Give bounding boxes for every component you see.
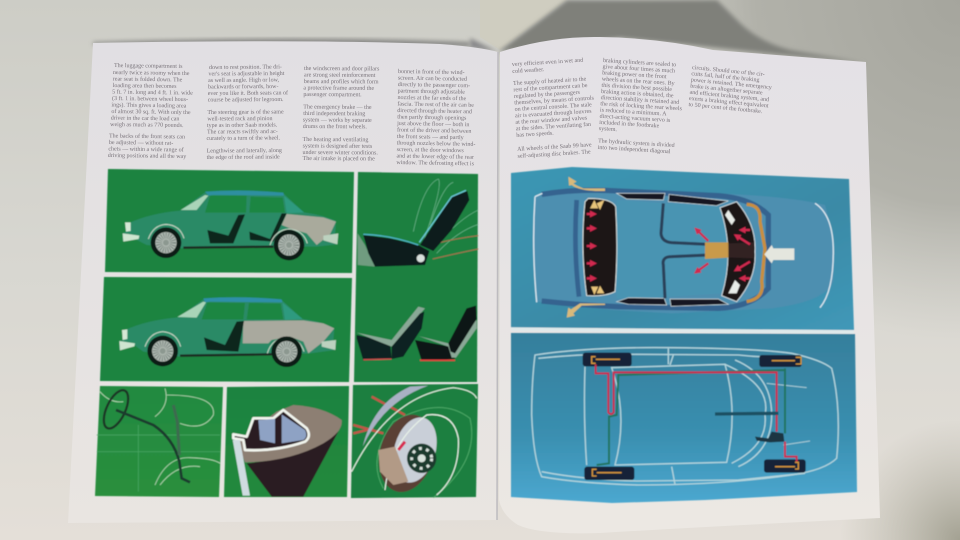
panel: car with rear seat folded xyxy=(105,169,354,273)
gutter line xyxy=(497,52,498,520)
text column 4: window. The defrosting effect is xyxy=(396,159,475,167)
text column 1: ings). This gives a loading area xyxy=(111,101,187,110)
panel: seats xyxy=(354,172,478,382)
car outline with brake circuits xyxy=(532,348,838,485)
text column 6 xyxy=(598,58,685,156)
panel: heating and ventilation xyxy=(511,167,854,330)
text column 6: give about four times as much xyxy=(602,63,675,75)
right page body text xyxy=(512,56,773,160)
rear window xyxy=(583,198,617,296)
text column 1: The luggage compartment is xyxy=(114,63,183,70)
text column 2: ever you like it. Both seats can of xyxy=(208,89,288,97)
text column 4: screen. Air can be conducted xyxy=(398,75,467,83)
text column 1: 5 ft. 7 in. long and 4 ft. 1 in. wide xyxy=(112,88,193,97)
text column 2: curately to a turn of the wheel. xyxy=(206,135,280,142)
text column 7: cuits fail, half of the braking xyxy=(691,70,760,84)
text column 2: the edge of the roof and inside xyxy=(207,154,280,161)
text column 1: The backs of the front seats can xyxy=(109,132,185,141)
text column 6: braking cylinders are sealed to xyxy=(603,58,676,68)
text column 2: backwards or forwards, how- xyxy=(208,83,278,91)
shadow behind the right page xyxy=(498,0,866,63)
text column 6: The hydraulic system is divided xyxy=(598,138,675,149)
panel: brake system xyxy=(511,333,857,503)
text column 4: partment through adjustable xyxy=(398,88,465,96)
text column 4: and at the lower edge of the rear xyxy=(396,152,474,161)
text column 6: included in the footbrake xyxy=(599,119,660,130)
text column 5: very efficient even in wet and xyxy=(512,57,583,68)
rear seat xyxy=(249,213,287,242)
master cylinder xyxy=(755,432,784,442)
text column 3: under severe winter conditions. xyxy=(303,150,378,156)
text column 6: braking action is obtained, the xyxy=(601,89,674,99)
text column 7: and efficient braking system, and xyxy=(689,89,769,103)
blue illustration panels xyxy=(511,167,857,503)
text column 3: beams and profiles which form xyxy=(304,78,379,85)
wheels xyxy=(151,227,181,258)
text column 7: to 50 per cent of the footbrake. xyxy=(688,101,763,115)
text column 3: system — works by separate xyxy=(303,117,372,124)
front seat reclined xyxy=(204,321,244,352)
text column 4: bonnet in front of the wind- xyxy=(398,68,465,76)
text column 6: into two independent diagonal xyxy=(598,145,671,155)
text column 3: a protective frame around the xyxy=(303,84,374,92)
front seat xyxy=(207,214,245,243)
text column 1: rear seat is folded down. The xyxy=(113,75,183,83)
text column 3: The heating and ventilating xyxy=(303,137,368,143)
text column 1: driving positions and all the way xyxy=(108,153,186,160)
text column 1 xyxy=(108,63,194,160)
text column 2: type as in other Saab models. xyxy=(207,123,278,129)
panel: steering xyxy=(95,386,223,497)
text column 1: nearly twice as roomy when the xyxy=(113,70,190,77)
text column 3: system is designed after tests xyxy=(303,142,373,150)
text column 5: has two speeds. xyxy=(516,131,554,139)
text column 4: directed through the heater and xyxy=(397,108,472,115)
text column 7: exerts a braking effect equivalent xyxy=(689,95,769,110)
brake pads xyxy=(583,353,632,366)
shadow behind gutter xyxy=(470,38,498,52)
text column 3: drums on the front wheels. xyxy=(303,123,367,130)
text column 5: at the rear window and valves xyxy=(515,115,588,126)
green brake circuit xyxy=(597,368,785,465)
text column 2 xyxy=(206,64,288,161)
right page xyxy=(499,37,880,533)
adjustable seat with arcs xyxy=(358,179,478,267)
car side view, seats reclined xyxy=(119,297,336,367)
red air arrows xyxy=(587,214,750,278)
left page body text xyxy=(108,63,477,167)
text column 1: be adjusted — without rat- xyxy=(109,140,173,147)
shadow above the left page xyxy=(93,38,470,47)
text column 2: ver's seat is adjustable in height xyxy=(209,71,285,78)
disc brake xyxy=(352,386,477,498)
car side view, load area xyxy=(123,191,338,260)
panel: body profile xyxy=(224,386,349,497)
text column 4: just above the floor — both in xyxy=(396,120,469,128)
text column 5: rest of the compartment can be xyxy=(513,82,588,93)
text column 5 xyxy=(512,56,598,160)
side windows xyxy=(617,193,665,200)
text column 6: is reduced to a minimum. A xyxy=(600,108,667,118)
text column 6: system. xyxy=(599,126,618,133)
wheels xyxy=(147,336,178,366)
text column 1: chets — within a wide range of xyxy=(108,145,184,153)
text column 4: directly to the passenger com- xyxy=(398,82,470,89)
text column 1: (3 ft. 1 in. between wheel hous- xyxy=(112,95,188,103)
table shadows xyxy=(93,0,866,63)
green illustration panels xyxy=(95,169,478,498)
text column 7 xyxy=(688,64,773,116)
pedal rod xyxy=(715,408,778,419)
text column 1: driver in the car the load can xyxy=(111,115,179,122)
text column 1: of almost 30 sq. ft. With only the xyxy=(111,108,191,116)
text column 4 xyxy=(395,68,477,167)
text column 6: this division the best possible xyxy=(601,83,673,93)
text column 1: weigh as much as 770 pounds. xyxy=(110,122,184,129)
text column 3: The air intake is placed on the xyxy=(303,156,375,162)
text column 5: All wheels of the Saab 99 have xyxy=(517,141,592,153)
text column 5: The supply of heated air to the xyxy=(513,75,587,87)
text column 4: then partly through openings xyxy=(397,114,467,122)
text column 5: on the central console. The stale xyxy=(515,102,592,113)
text column 4: front of the driver and between xyxy=(397,126,472,135)
text column 6: wheels as on the rear ones. By xyxy=(602,77,675,87)
text column 4: the front seats — and partly xyxy=(397,133,464,141)
outside air intake xyxy=(747,204,765,302)
text column 5: self-adjusting disc brakes. The xyxy=(517,148,591,160)
text column 4: through nozzles below the wind- xyxy=(397,140,475,148)
text column 3: The emergency brake — the xyxy=(303,104,372,111)
text column 7: power is retained. The emergency xyxy=(691,77,772,91)
panel: car with seats reclined xyxy=(100,277,352,382)
text column 2: down to rest position. The dri- xyxy=(209,64,282,71)
text column 3: passenger compartment. xyxy=(303,92,362,98)
text column 5: regulated by the passengers xyxy=(514,90,581,100)
air ducts xyxy=(661,203,708,298)
text column 2: course be adjusted for legroom. xyxy=(208,96,284,104)
text column 6: the risk of locking the rear wheels xyxy=(600,100,683,112)
exhaust arrows xyxy=(568,177,605,191)
text column 2: as well as angle. High or low, xyxy=(208,78,280,84)
body profile section xyxy=(233,405,342,497)
left page xyxy=(68,41,498,523)
text column 6: braking power on the front xyxy=(602,69,667,80)
text column 2: well-tested rack and pinion xyxy=(207,116,273,123)
windscreen xyxy=(720,202,755,302)
text column 5: cold weather. xyxy=(512,67,545,75)
text column 5: air is evacuated through louvres xyxy=(515,109,592,119)
text column 3: the windscreen and door pillars xyxy=(304,66,380,72)
panel: disc brake xyxy=(351,384,478,498)
divider between blue panels xyxy=(511,329,854,332)
seat pair xyxy=(357,306,477,361)
text column 6: direct-acting vacuum servo is xyxy=(599,114,671,124)
text column 1: loading area then becomes xyxy=(113,83,177,90)
text column 2: The car reacts swiftly and ac- xyxy=(207,128,278,136)
text column 3 xyxy=(303,66,380,162)
text column 2: Lengthwise and laterally, along xyxy=(207,148,282,155)
text column 5: themselves, by means of controls xyxy=(514,95,595,106)
text column 7: brake is an altogether separate xyxy=(690,84,763,96)
red brake circuit xyxy=(596,364,797,462)
light wedge above gutter xyxy=(480,0,567,50)
text column 6: direction stability is retained and xyxy=(601,95,679,106)
steering mechanism xyxy=(97,387,220,492)
text column 3: are strong steel reinforcement xyxy=(304,71,376,79)
text column 2: The steering gear is of the same xyxy=(207,108,284,116)
text column 4: screen, at the door windows xyxy=(397,147,464,154)
text column 5: at the sides. The ventilating fan xyxy=(516,121,591,132)
text column 3: third independent braking xyxy=(303,111,365,117)
text column 4: nozzles at the far ends of the xyxy=(397,94,467,102)
text column 7: circuits. Should one of the cir- xyxy=(692,64,765,78)
brochure spread xyxy=(68,37,880,533)
text column 4: fascia. The rest of the air can be xyxy=(397,100,474,109)
car top view with air flow xyxy=(533,177,834,318)
